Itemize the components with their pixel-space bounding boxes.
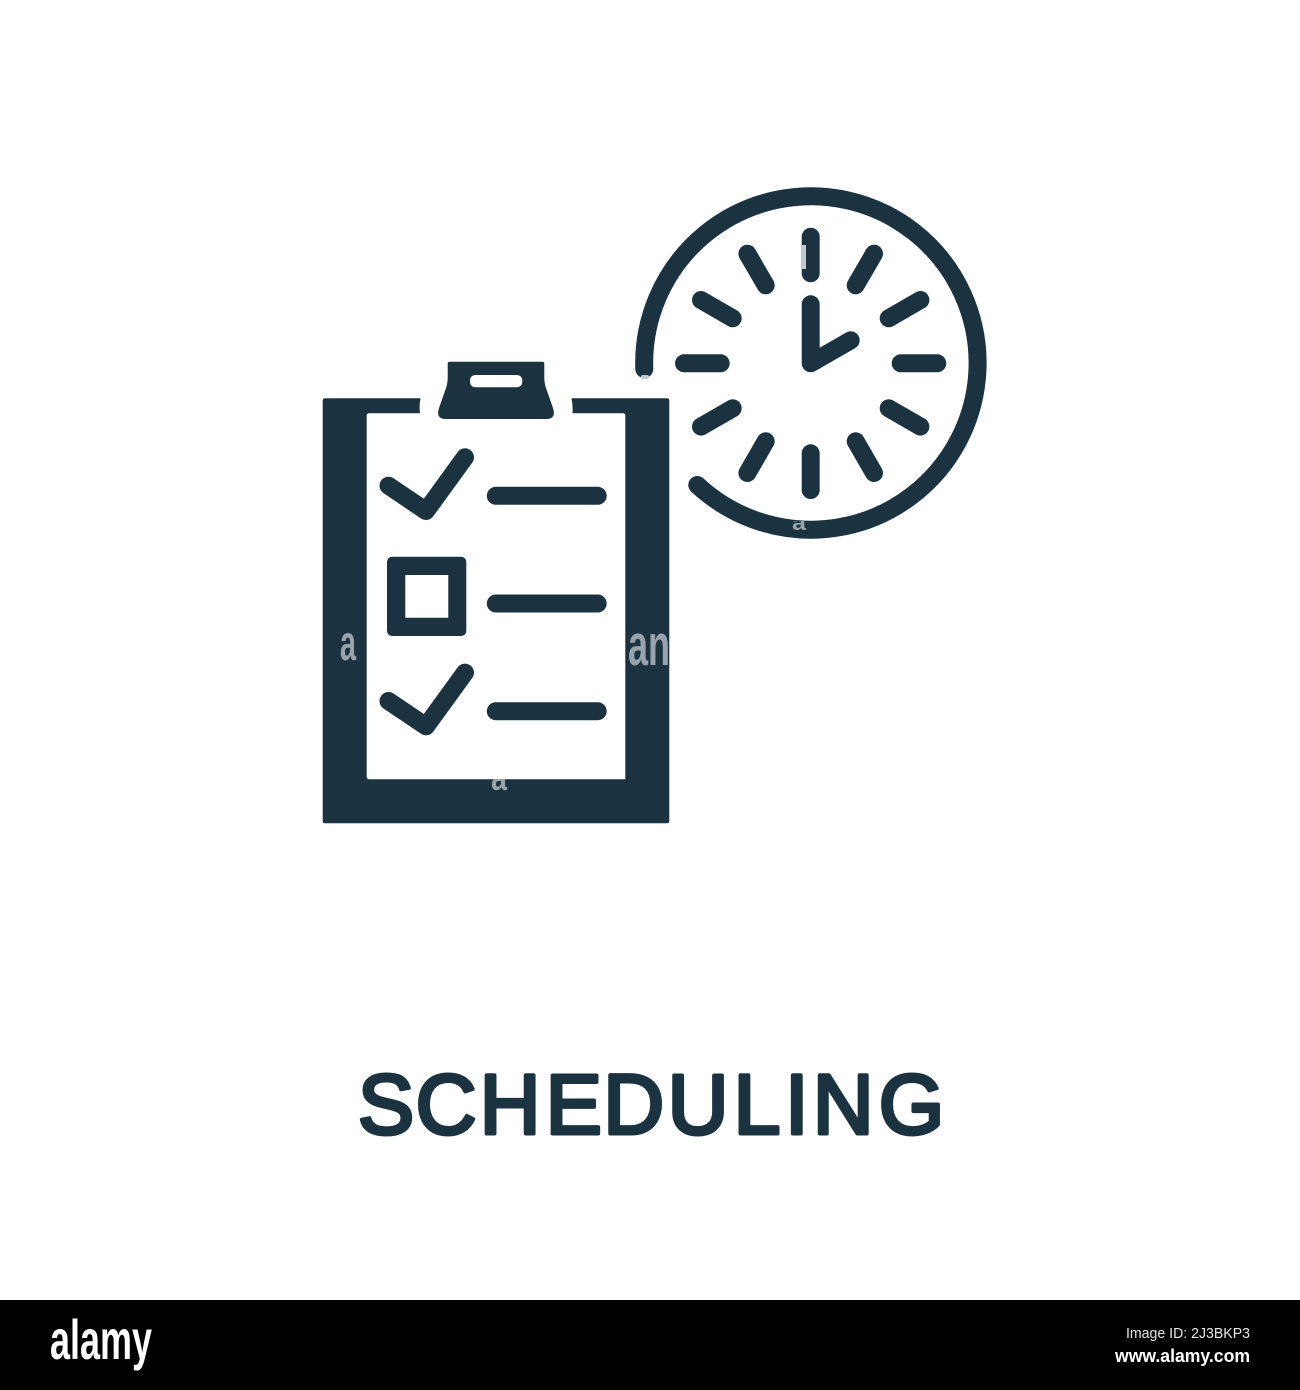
watermark fragments: a [340, 615, 357, 671]
watermark fragments [340, 245, 807, 798]
clipboard board [323, 398, 669, 823]
clock hour ticks [684, 237, 937, 490]
image id: Image ID: 2J3BKP3 [1126, 1325, 1250, 1342]
checklist item 2: empty checkbox and line [387, 557, 598, 636]
clock hands [811, 304, 851, 363]
clock rim [644, 196, 978, 530]
website: www.alamy.com [1114, 1346, 1250, 1366]
watermark fragments: a [491, 757, 508, 798]
checklist item 3: check mark and line [388, 673, 598, 726]
footer band [0, 1300, 1300, 1390]
icon: clock [644, 196, 978, 530]
footer logo: alamy [50, 1308, 152, 1371]
title: SCHEDULING [358, 1058, 944, 1152]
clipboard clip [438, 362, 554, 419]
checklist item 1: check mark and line [388, 457, 598, 511]
watermark fragments: a [792, 510, 807, 535]
icon: clipboard checklist [323, 362, 669, 823]
watermark fragments: lan [618, 613, 670, 678]
